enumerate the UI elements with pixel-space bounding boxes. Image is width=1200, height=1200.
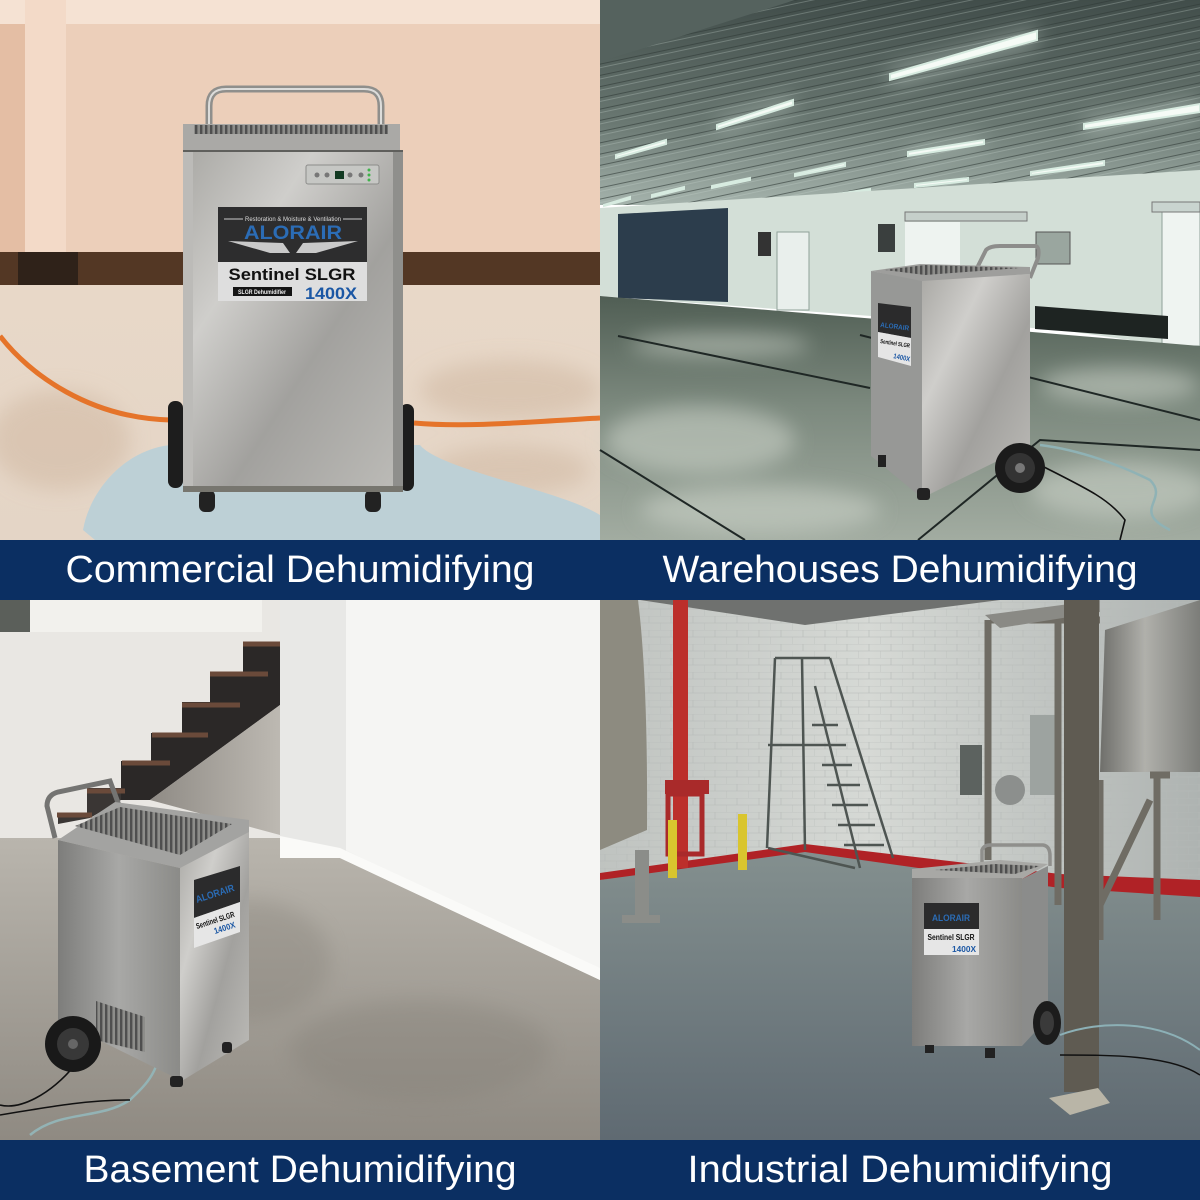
dehumidifier front view — [168, 89, 414, 512]
body — [183, 150, 403, 492]
wall pillar — [0, 0, 66, 255]
wall — [600, 170, 1200, 350]
side panel — [871, 271, 922, 498]
floor — [600, 296, 1200, 540]
wheel — [878, 443, 1045, 500]
caption band: basement: Basement Dehumidifying — [84, 1149, 516, 1191]
red floor trim — [600, 844, 1200, 897]
water puddle — [83, 445, 600, 540]
label — [878, 303, 911, 366]
dehumidifier angled view — [871, 246, 1045, 500]
floor joints — [600, 335, 1200, 540]
left side panel — [58, 840, 180, 1080]
ceiling lights — [604, 31, 1200, 206]
staircase — [57, 642, 280, 835]
side panel — [1022, 866, 1048, 1046]
floor — [600, 846, 1200, 1140]
black wall bumper — [1035, 306, 1168, 339]
wall doors and fixtures — [758, 202, 1200, 346]
rear vent — [96, 1001, 145, 1052]
product label: SLGR Dehumidifier — [238, 289, 286, 296]
handle — [982, 845, 1050, 866]
label: 1400X — [952, 945, 977, 954]
wheels — [168, 401, 414, 512]
caption band: industrial — [600, 1140, 1200, 1200]
red pipe — [665, 600, 709, 868]
label — [924, 903, 979, 955]
label: ALORAIR — [880, 322, 909, 333]
product label: Sentinel SLGR — [228, 265, 356, 284]
front steel column — [1049, 600, 1110, 1115]
yellow bollards — [668, 814, 747, 878]
floor — [0, 285, 600, 540]
label: 1400X — [213, 920, 237, 936]
panel: commercial dehumidifying scene — [0, 0, 600, 540]
wheel — [925, 1001, 1061, 1058]
brick walls — [600, 600, 1200, 890]
overhead platform — [985, 600, 1100, 628]
product label: 1400X — [305, 285, 357, 303]
power cord — [0, 1025, 161, 1135]
baseboard — [0, 252, 600, 290]
panel: warehouses dehumidifying scene — [600, 0, 1200, 540]
dehumidifier rear view — [45, 781, 249, 1087]
front panel — [912, 878, 1022, 1046]
product label: ALORAIR — [244, 223, 342, 244]
floor — [0, 838, 600, 1140]
left tank — [600, 600, 647, 850]
dehumidifier angled view — [912, 845, 1061, 1058]
label: Sentinel SLGR — [195, 910, 236, 931]
skirting board — [280, 836, 600, 980]
product label — [218, 207, 367, 303]
steel tank — [1100, 600, 1200, 772]
label: 1400X — [893, 353, 911, 364]
dark doorway — [618, 208, 728, 302]
handle — [977, 246, 1039, 278]
label: ALORAIR — [932, 913, 970, 923]
label: Sentinel SLGR — [880, 339, 911, 350]
top with grille — [58, 802, 249, 868]
caption band: warehouses — [600, 540, 1200, 600]
floor post — [622, 850, 660, 923]
wheel — [45, 1016, 232, 1087]
top grille — [871, 264, 1030, 281]
top cap and grille — [183, 124, 403, 152]
handle — [209, 89, 381, 124]
handle — [47, 781, 120, 838]
panel: basement dehumidifying scene — [0, 600, 600, 1140]
caption band: industrial: Industrial Dehumidifying — [688, 1149, 1112, 1191]
ceiling — [600, 0, 1200, 205]
caption band: warehouses: Warehouses Dehumidifying — [662, 549, 1138, 591]
right side panel — [180, 830, 249, 1082]
power cord — [1060, 1025, 1200, 1075]
control panel — [306, 165, 379, 184]
back wall — [0, 0, 600, 262]
panel: industrial dehumidifying scene — [600, 600, 1200, 1140]
caption band: commercial — [0, 540, 600, 600]
caption band: basement — [0, 1140, 600, 1200]
power cord — [1040, 445, 1170, 540]
front panel — [922, 274, 1030, 498]
right equipment — [960, 715, 1058, 805]
left wall — [0, 600, 280, 840]
orange hose — [0, 336, 600, 425]
ceiling light glow — [717, 28, 1200, 158]
label — [194, 866, 240, 948]
label: ALORAIR — [195, 883, 237, 906]
tank stand — [988, 620, 1170, 940]
rolling ladder — [767, 658, 893, 868]
white corridor wall — [280, 600, 600, 980]
product label: Restoration & Moisture & Ventilation — [245, 216, 341, 223]
label: Sentinel SLGR — [928, 933, 975, 942]
top cap — [912, 860, 1048, 879]
caption band: commercial: Commercial Dehumidifying — [66, 549, 534, 591]
